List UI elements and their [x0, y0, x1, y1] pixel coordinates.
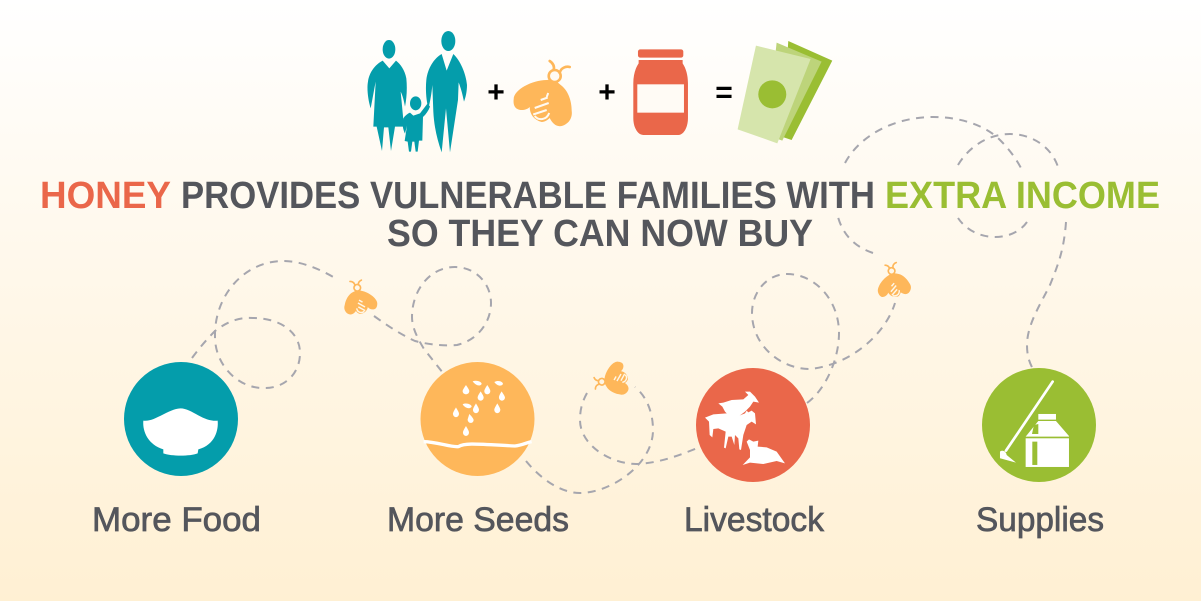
- icon: food circle with bowl: [124, 362, 238, 476]
- icon: seeds circle: [420, 362, 534, 476]
- icon: supplies circle with hoe and barn: [982, 368, 1096, 482]
- title: PROVIDES VULNERABLE FAMILIES WITH: [181, 175, 875, 217]
- plus sign: +: [598, 76, 616, 109]
- icon: money: [738, 41, 832, 143]
- icon: small bee 3: [868, 259, 914, 306]
- label: supplies: Supplies: [976, 501, 1104, 539]
- icon: livestock circle with goats: [696, 368, 810, 482]
- panel: more food: [92, 362, 261, 539]
- title: EXTRA INCOME: [885, 175, 1160, 217]
- title: HONEY: [40, 175, 171, 217]
- icon: honey jar: [633, 49, 688, 135]
- panel: more seeds: [387, 362, 569, 539]
- label: more food: More Food: [92, 501, 261, 539]
- icon: small bee 2: [592, 358, 633, 396]
- icon: bee: [514, 61, 572, 126]
- panel: livestock: [684, 368, 825, 539]
- equation row: [367, 31, 832, 152]
- plus sign: +: [487, 76, 505, 109]
- panel: supplies: [976, 368, 1104, 539]
- icon: family: [367, 31, 467, 152]
- icon: small bee 1: [343, 278, 381, 319]
- equals sign: =: [715, 76, 733, 109]
- title: SO THEY CAN NOW BUY: [387, 213, 813, 255]
- title: [40, 175, 1160, 255]
- label: livestock: Livestock: [684, 501, 825, 539]
- label: more seeds: More Seeds: [387, 501, 569, 539]
- dashed flight paths: [192, 117, 1066, 493]
